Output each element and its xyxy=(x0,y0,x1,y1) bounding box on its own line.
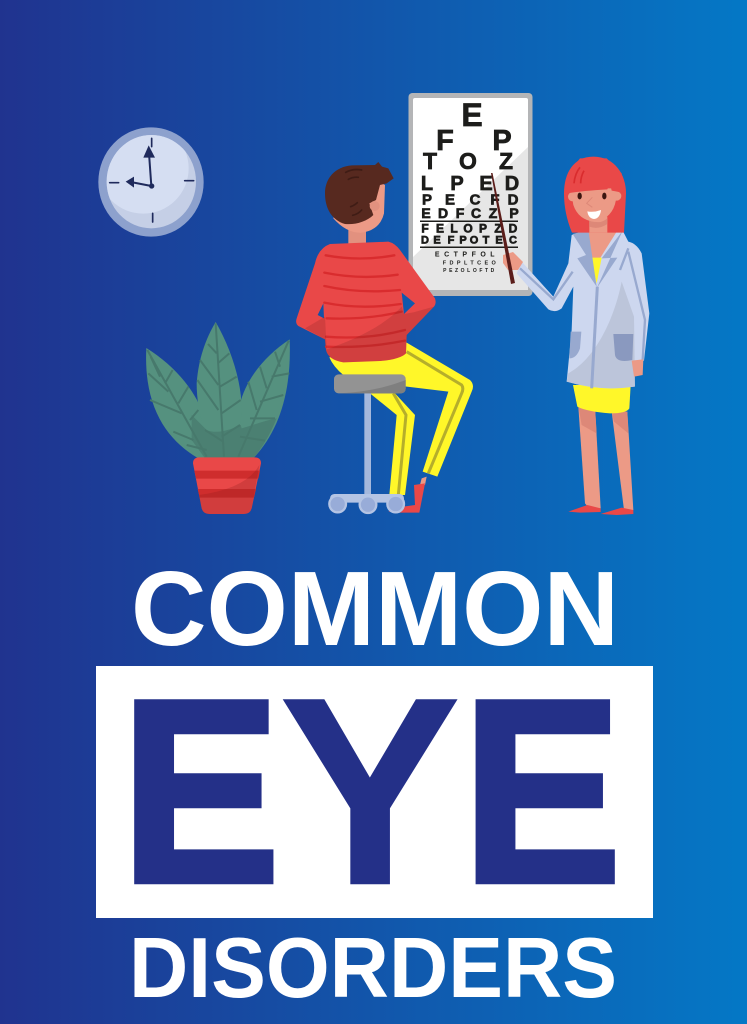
icon: wall clock xyxy=(98,123,204,237)
title: COMMON: COMMON xyxy=(131,550,619,668)
panel: eye chart: D xyxy=(421,234,429,246)
panel: eye chart: P xyxy=(459,234,467,246)
panel: eye chart: ECTPFOL xyxy=(435,252,499,258)
title: EYE: Y xyxy=(278,641,462,942)
panel: eye chart: E xyxy=(436,222,444,236)
panel: eye chart: P xyxy=(450,173,464,195)
panel: eye chart: F xyxy=(490,192,500,208)
icon: potted plant xyxy=(146,322,290,514)
figure: seated patient xyxy=(296,162,473,513)
title: DISORDERS: DISORDERS xyxy=(129,921,617,1016)
figure: doctor xyxy=(517,220,649,515)
pointer xyxy=(491,173,515,284)
panel: eye chart: L xyxy=(421,173,433,195)
back leg xyxy=(370,393,415,495)
panel: eye chart: P xyxy=(492,125,512,157)
panel: eye chart: E xyxy=(421,205,431,221)
panel: eye chart: D xyxy=(509,222,518,236)
panel: eye chart: F xyxy=(448,234,455,246)
panel: eye chart: O xyxy=(470,234,479,246)
panel: eye chart: C xyxy=(509,234,517,246)
panel: eye chart: O xyxy=(463,222,473,236)
panel: eye chart: C xyxy=(471,205,481,221)
panel: eye chart: E xyxy=(461,97,483,133)
panel: eye chart: FDPLTCEO xyxy=(443,260,499,266)
front leg and hips xyxy=(329,343,473,477)
panel: eye chart: Z xyxy=(494,222,502,236)
panel: eye chart: PEZOLOFTD xyxy=(443,268,497,274)
panel: eye chart: F xyxy=(421,222,429,236)
panel: eye chart: L xyxy=(450,222,458,236)
title: EYE: E xyxy=(462,646,621,937)
panel: eye chart: E xyxy=(479,173,493,195)
panel: eye chart: T xyxy=(423,148,437,174)
title: EYE: E xyxy=(121,646,280,937)
neck and head xyxy=(348,227,366,245)
panel: eye chart: O xyxy=(459,148,477,174)
panel: eye chart: C xyxy=(470,192,481,208)
skirt xyxy=(573,385,631,413)
panel: eye chart: E xyxy=(445,192,455,208)
panel: eye chart: D xyxy=(508,192,519,208)
panel: eye chart xyxy=(408,93,532,296)
panel: eye chart: Z xyxy=(499,148,513,174)
panel: eye chart: D xyxy=(505,173,519,195)
panel: eye chart: F xyxy=(436,125,454,157)
title: EYE xyxy=(121,641,621,942)
panel: eye chart: P xyxy=(509,205,519,221)
panel: eye chart: D xyxy=(438,205,448,221)
pockets xyxy=(569,332,581,358)
panel: eye chart: T xyxy=(483,234,490,246)
panel: eye chart: E xyxy=(495,234,503,246)
sweater xyxy=(296,242,436,362)
lab coat xyxy=(517,230,649,388)
doctor pointing hand xyxy=(503,252,523,270)
stool xyxy=(364,392,371,495)
panel: eye chart: Z xyxy=(489,205,498,221)
panel: eye chart: F xyxy=(456,205,465,221)
shoes xyxy=(420,477,427,485)
panel: eye chart: P xyxy=(479,222,487,236)
panel: eye chart: E xyxy=(433,234,441,246)
doctor hand xyxy=(632,359,643,377)
hair xyxy=(325,162,394,224)
panel: eye chart: P xyxy=(422,192,432,208)
legs xyxy=(578,407,601,508)
panel: EYE banner xyxy=(96,641,653,942)
neckline xyxy=(587,220,624,258)
doctor head xyxy=(564,157,626,233)
